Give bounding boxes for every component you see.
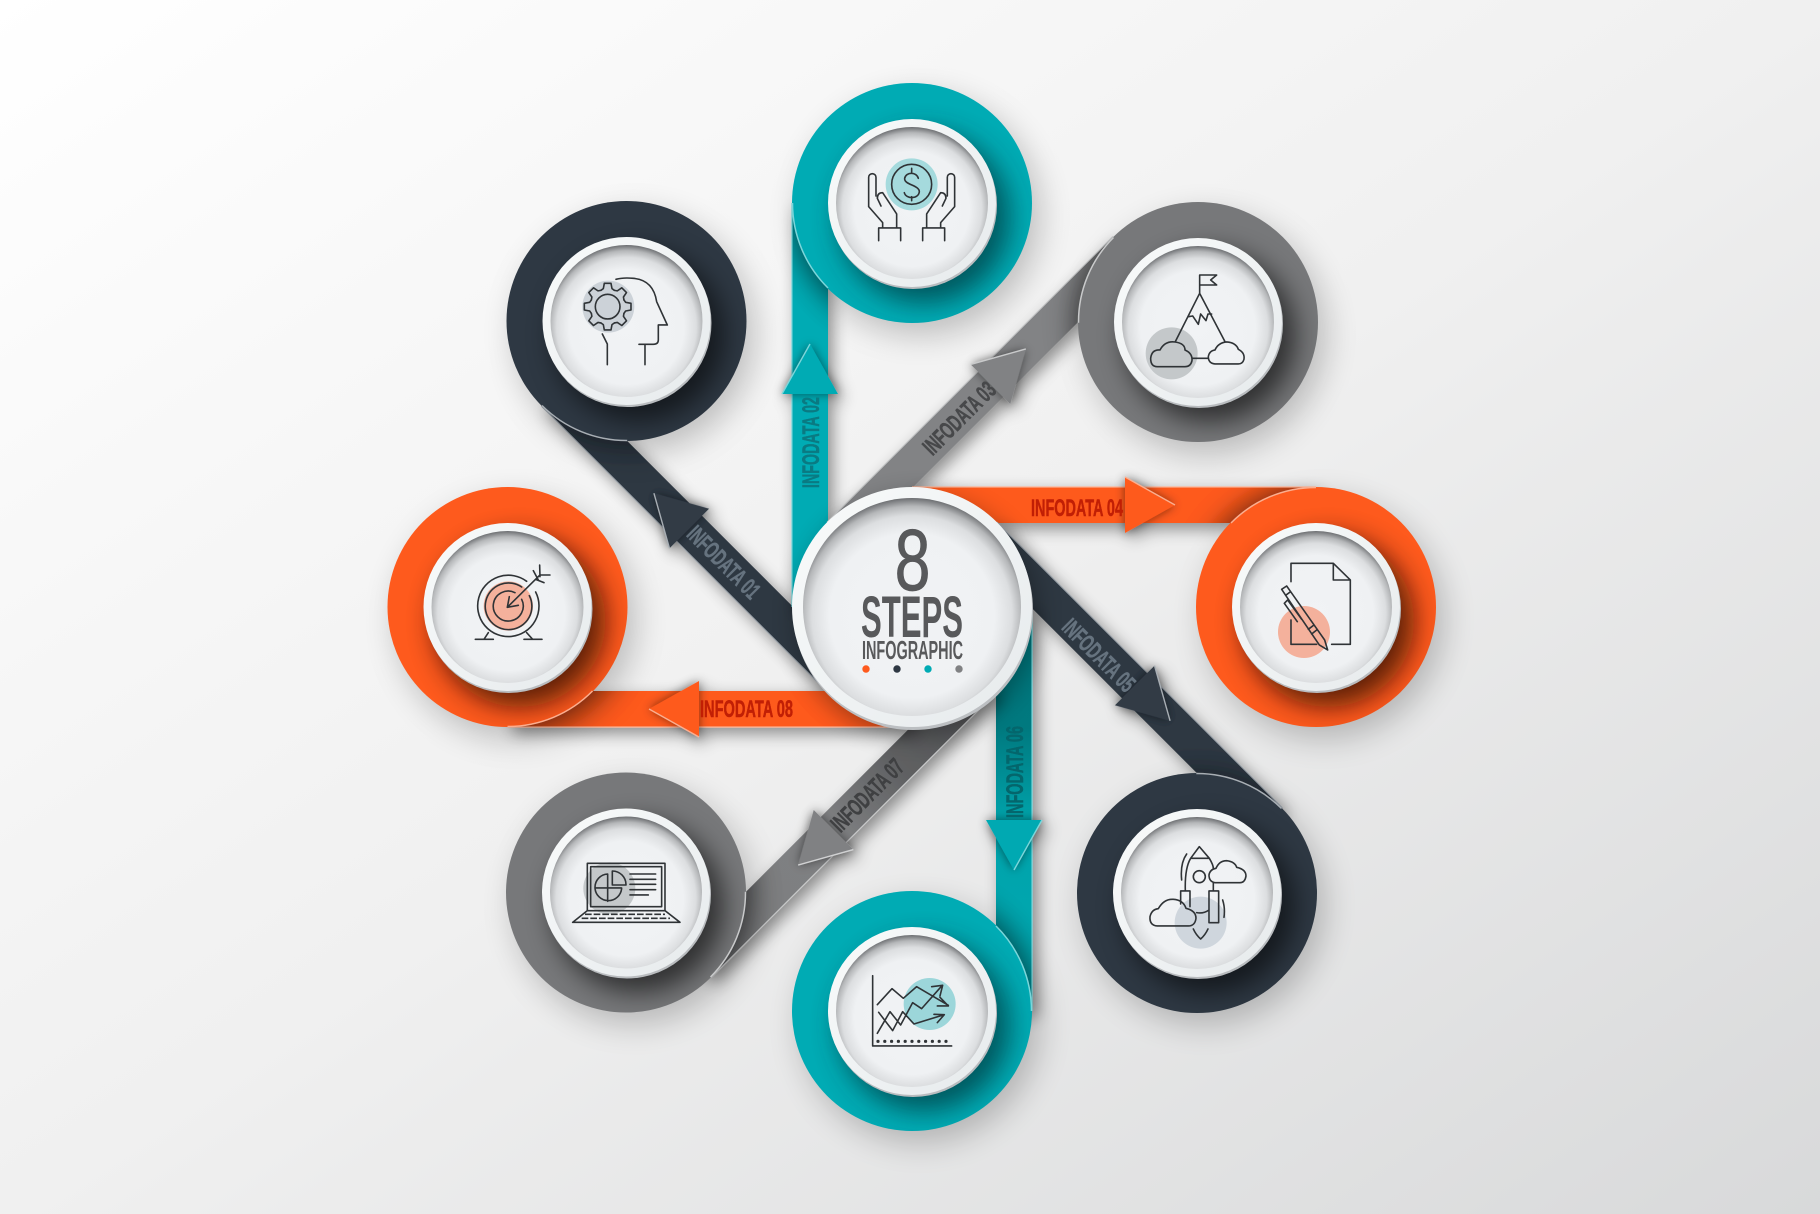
icon: line chart with arrows: [873, 976, 956, 1046]
icon: laptop with pie chart: [573, 862, 680, 922]
ribbon 03: [826, 236, 1114, 522]
hub colour dots: [862, 665, 963, 673]
step 01 disc: dark: [506, 201, 754, 466]
band and arrow 02: [776, 203, 850, 607]
label 06: INFODATA 06: [1002, 726, 1029, 818]
centre hub: [792, 487, 1037, 736]
band and arrow 05: [996, 522, 1294, 819]
label 07: INFODATA 07: [826, 754, 910, 838]
icon: target with arrow: [475, 565, 550, 639]
ribbon 02: [776, 203, 850, 607]
band and arrow 07: [704, 691, 1004, 990]
label 08: INFODATA 08: [700, 696, 793, 723]
ribbon 08: [504, 676, 919, 750]
hub title: 8: [895, 513, 930, 609]
icon: hands holding coin: [869, 158, 955, 241]
step 07 disc: gray: [506, 772, 771, 1024]
ribbon 07: [704, 691, 1004, 990]
label 03: INFODATA 03: [918, 377, 1002, 461]
step 02 disc: teal: [792, 83, 1040, 335]
label 01: INFODATA 01: [681, 521, 765, 605]
label 05: INFODATA 05: [1056, 614, 1140, 698]
icon: document and pen: [1278, 563, 1350, 658]
icon: mountain with flag: [1146, 275, 1244, 379]
step 08 disc: orange: [388, 487, 636, 739]
label 04: INFODATA 04: [1031, 495, 1123, 522]
step 06 disc: teal: [792, 891, 1040, 1143]
ribbon 04: [912, 472, 1322, 546]
step 05 disc: dark: [1077, 748, 1325, 1025]
hub title: STEPS: [861, 585, 963, 650]
band and arrow 03: [826, 236, 1114, 522]
hub title: INFOGRAPHIC: [862, 635, 963, 665]
hub title: [861, 513, 963, 665]
icon: head with gear: [582, 278, 667, 365]
band and arrow 08: [504, 676, 919, 750]
step 04 disc: orange: [1196, 487, 1444, 739]
label 02: INFODATA 02: [798, 397, 825, 488]
icon: rocket with clouds: [1150, 847, 1246, 949]
ribbon 06: [982, 610, 1054, 1026]
step 03 disc: gray: [1053, 202, 1326, 454]
hub disc: [792, 487, 1037, 736]
ribbon 05: [996, 522, 1294, 819]
band and arrow 06: [982, 610, 1054, 1026]
band and arrow 01: [540, 406, 824, 691]
band and arrow 04: [912, 472, 1322, 546]
ribbon 01: [540, 406, 824, 691]
